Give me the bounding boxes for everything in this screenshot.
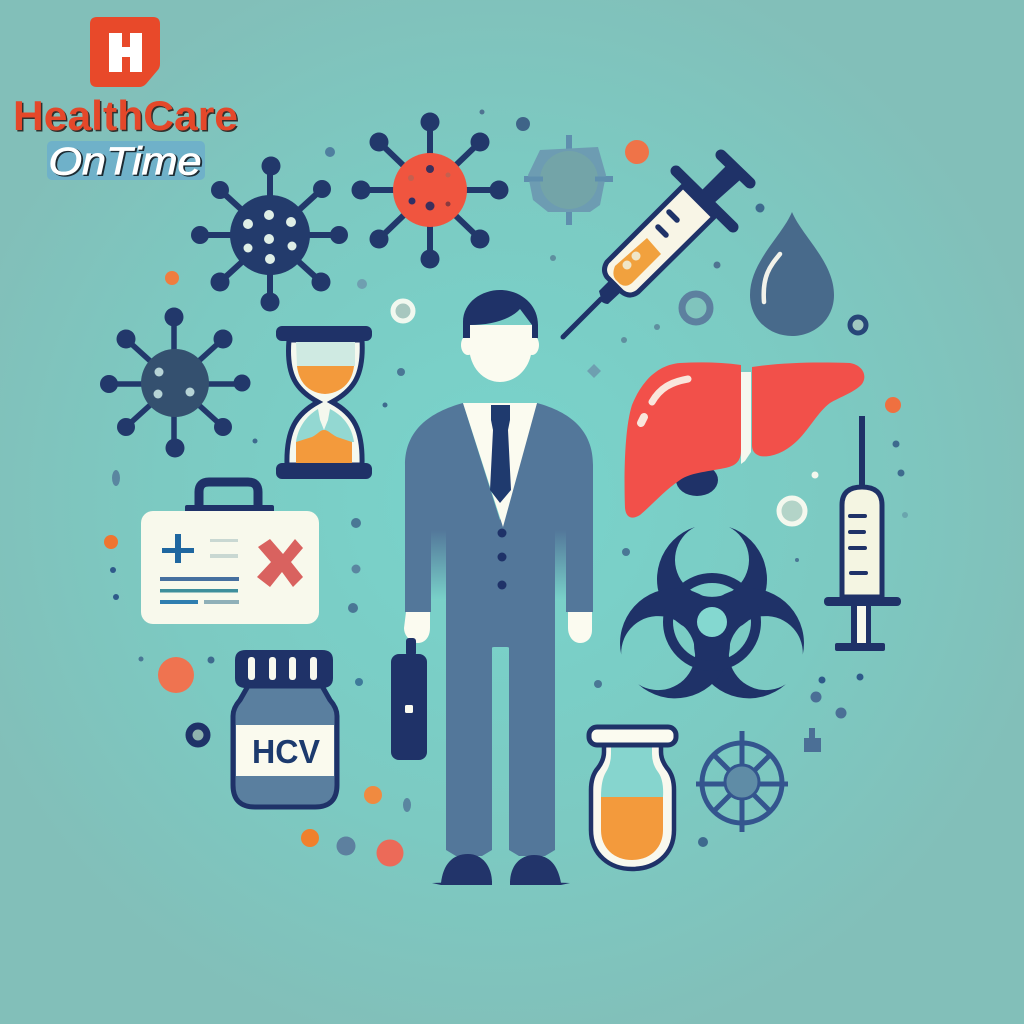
icon: diagonal syringe xyxy=(563,155,750,337)
icon: faint virus wheel xyxy=(696,731,788,832)
icon: water drop xyxy=(750,212,834,336)
logo wordmark: HealthCare xyxy=(13,92,238,139)
icon: red virus xyxy=(352,112,508,268)
icon: upright syringe xyxy=(824,416,901,651)
icon: liver xyxy=(625,362,864,518)
icon: HCV medicine bottle: HCV xyxy=(252,733,320,770)
icon: hourglass xyxy=(276,326,372,479)
hands xyxy=(404,612,592,643)
head xyxy=(461,290,539,382)
icon: biohazard symbol xyxy=(602,527,822,717)
suit xyxy=(405,403,593,856)
logo icon xyxy=(90,17,160,87)
icon: medical kit card xyxy=(141,482,319,624)
logo wordmark: HealthCare xyxy=(14,94,240,140)
logo: HealthCare OnTime xyxy=(13,17,240,184)
shoes xyxy=(432,854,570,885)
logo tagline: OnTime xyxy=(48,140,202,184)
logo tagline: OnTime xyxy=(50,142,203,184)
figure: businessman xyxy=(391,290,593,885)
briefcase xyxy=(391,638,427,760)
icon: vial with orange liquid xyxy=(589,727,676,869)
icon: faded virus xyxy=(524,135,613,225)
icon: HCV medicine bottle xyxy=(233,650,337,807)
icon: dark virus left xyxy=(100,308,250,458)
decorative dots and rings xyxy=(104,110,908,866)
icon: dark virus top left xyxy=(191,156,348,312)
